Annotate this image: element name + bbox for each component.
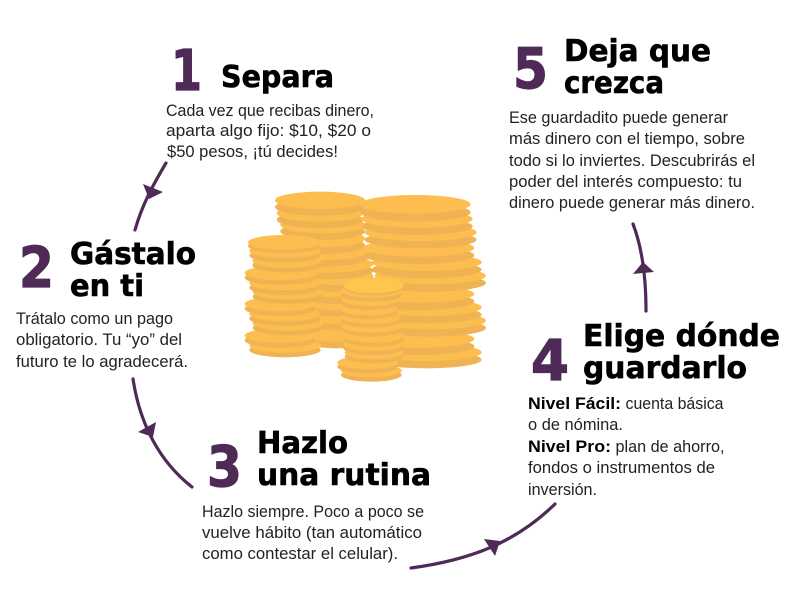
coin stack: left <box>245 235 323 357</box>
heading: Deja que crezca <box>564 34 711 101</box>
text: step 4 description <box>528 394 724 499</box>
heading: Elige dónde guardarlo: Elige dónde <box>583 319 780 354</box>
text: step 5 description: dinero puede generar más dinero. <box>509 193 755 212</box>
text: step 4 description: plan de ahorro, <box>616 437 724 456</box>
text: step 1 description <box>166 101 374 161</box>
number 4: 4 <box>531 329 569 394</box>
coin stack: back left <box>275 192 373 348</box>
text: step 5 description: poder del interés compuesto: tu <box>509 172 742 191</box>
text: step 5 description: todo si lo inviertes. Descubrirás el <box>509 151 755 170</box>
step 4: Elige dónde guardarlo <box>528 319 780 499</box>
heading: Deja que crezca: crezca <box>564 66 664 101</box>
heading: Elige dónde guardarlo <box>583 319 780 386</box>
text: step 5 description <box>509 108 755 212</box>
text: step 2 description: obligatorio. Tu “yo” del <box>16 330 182 349</box>
arrow: step 2 to step 3 <box>133 379 192 487</box>
text: step 4 description: fondos o instrumentos de <box>528 458 715 477</box>
number 1: 1 <box>171 39 202 104</box>
heading: Gástalo en ti: en ti <box>70 269 144 304</box>
text: step 4 description: Nivel Pro: <box>528 437 611 456</box>
icon: coin stacks <box>245 192 486 382</box>
text: step 1 description: aparta algo fijo: $10, $20 o <box>166 121 371 140</box>
text: step 2 description <box>16 309 188 371</box>
heading: Hazlo una rutina: una rutina <box>257 458 431 493</box>
arrow: step 1 to step 2 <box>135 163 166 230</box>
text: step 5 description: más dinero con el tiempo, sobre <box>509 129 745 148</box>
text: step 2 description: Trátalo como un pago <box>16 309 173 328</box>
heading: Separa: Separa <box>221 60 334 95</box>
text: step 1 description: $50 pesos, ¡tú decides! <box>167 142 338 161</box>
coin stack: back right <box>360 195 486 368</box>
text: step 4 description: inversión. <box>528 480 597 499</box>
text: step 3 description: como contestar el celular). <box>202 544 398 563</box>
text: step 3 description: vuelve hábito (tan automático <box>202 523 422 542</box>
text: step 3 description <box>202 502 424 563</box>
text: step 2 description: futuro te lo agradecerá. <box>16 352 188 371</box>
text: step 4 description: cuenta básica <box>626 394 724 413</box>
step 3: Hazlo una rutina <box>202 426 431 563</box>
text: step 4 description: Nivel Fácil: <box>528 394 621 413</box>
number 3: 3 <box>207 435 242 500</box>
heading: Hazlo una rutina: Hazlo <box>257 426 348 461</box>
heading: Gástalo en ti: Gástalo <box>70 237 196 272</box>
step 5: Deja que crezca <box>509 34 755 212</box>
number 5: 5 <box>513 37 548 102</box>
heading: Gástalo en ti <box>70 237 196 304</box>
heading: Hazlo una rutina <box>257 426 431 493</box>
arrow: step 3 to step 4 <box>411 504 555 568</box>
step 1: Separa <box>166 39 374 161</box>
arrow: step 4 to step 5 <box>633 224 654 311</box>
text: step 4 description: o de nómina. <box>528 415 623 434</box>
text: step 5 description: Ese guardadito puede generar <box>509 108 728 127</box>
coin stack: front <box>337 277 404 382</box>
text: step 1 description: Cada vez que recibas dinero, <box>166 101 374 120</box>
heading: Elige dónde guardarlo: guardarlo <box>583 351 747 386</box>
heading: Deja que crezca: Deja que <box>564 34 711 69</box>
step 2: Gástalo en ti <box>16 236 196 371</box>
text: step 3 description: Hazlo siempre. Poco a poco se <box>202 502 424 521</box>
number 2: 2 <box>19 236 54 301</box>
